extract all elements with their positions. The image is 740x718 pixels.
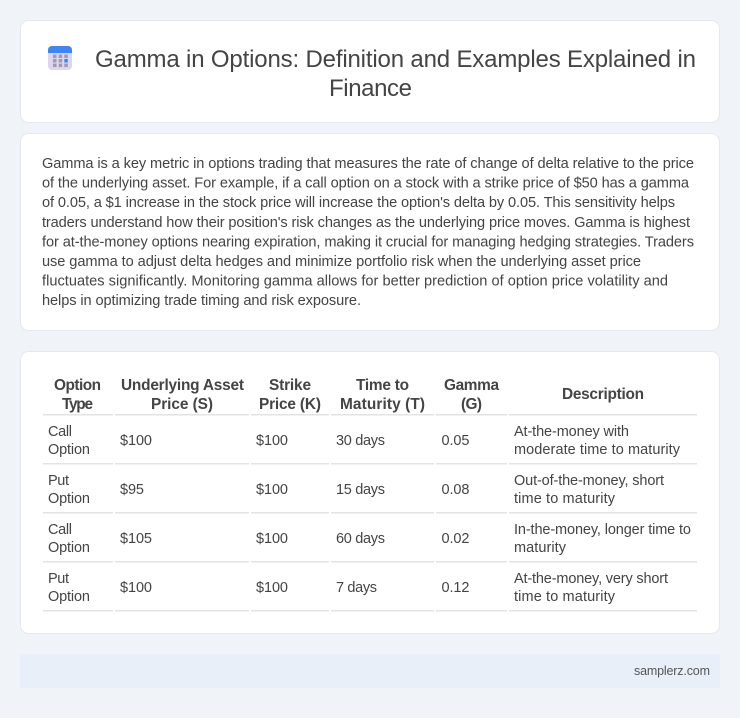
table header row: Gamma xyxy=(444,377,499,394)
table row: call option, $100: moderate time to maturity xyxy=(514,442,681,458)
text block: gamma explanation: traders understand how their position's risk changes as the underlying price moves. Gamma is highest xyxy=(42,215,690,231)
table row: put option, $100: time to maturity xyxy=(514,589,616,605)
table header row: Maturity (T) xyxy=(340,396,425,413)
text block: gamma explanation: helps in optimizing trade timing and risk exposure. xyxy=(42,293,361,309)
table row: put option, $100: 7 days xyxy=(336,580,377,596)
table row: put option, $100: At-the-money, very short xyxy=(514,571,668,587)
table row: put option, $95: 15 days xyxy=(336,482,385,498)
text block: gamma explanation: use gamma to adjust delta hedges and minimize portfolio risk when the underlying asset price xyxy=(42,254,641,270)
panel: table xyxy=(20,352,720,634)
table header row: Price (K) xyxy=(259,396,321,413)
table row: put option, $95 xyxy=(43,473,697,514)
table row: call option, $105: $100 xyxy=(256,531,288,547)
table header row: Strike xyxy=(269,377,311,394)
text block: gamma explanation: for at-the-money options nearing expiration, making it crucial for managing hedging strategies. Traders xyxy=(42,234,694,250)
table row: put option, $100: Option xyxy=(48,589,90,605)
table header row: Price (S) xyxy=(151,396,213,413)
table row: call option, $100: $100 xyxy=(120,433,152,449)
table row: call option, $100: At-the-money with xyxy=(514,424,629,440)
table row: call option, $100: $100 xyxy=(256,433,288,449)
text block: gamma explanation: of 0.05, a $1 increase in the stock price will increase the option's delta by 0.05. This sensitivity helps xyxy=(42,195,675,211)
panel: description text xyxy=(20,134,720,330)
table header row: Option xyxy=(54,377,101,394)
table row: call option, $105: 0.02 xyxy=(442,531,470,547)
footer xyxy=(20,654,720,688)
table row: call option, $105 xyxy=(43,522,697,562)
table header row xyxy=(43,377,697,416)
text block: gamma explanation: of the underlying asset. For example, if a call option on a stock with a strike price of $50 has a gamma xyxy=(42,176,690,192)
table header row: Underlying Asset xyxy=(121,377,244,394)
table row: call option, $105: 60 days xyxy=(336,531,385,547)
table row: call option, $105: maturity xyxy=(514,540,567,556)
title xyxy=(95,46,696,102)
table row: put option, $100: 0.12 xyxy=(442,580,470,596)
table row: put option, $95: time to maturity xyxy=(514,491,616,507)
text block: gamma explanation xyxy=(42,156,694,309)
table row: call option, $105: $105 xyxy=(120,531,152,547)
table header row: Type xyxy=(62,396,93,413)
table row: call option, $105: Option xyxy=(48,540,90,556)
table row: put option, $95: $95 xyxy=(120,482,144,498)
table row: call option, $100: Option xyxy=(48,442,90,458)
table row: call option, $100 xyxy=(43,424,697,464)
table row: put option, $95: $100 xyxy=(256,482,288,498)
table row: put option, $95: 0.08 xyxy=(442,482,470,498)
text block: gamma explanation: Gamma is a key metric in options trading that measures the rate of change of delta relative to the price xyxy=(42,156,694,172)
footer: samplerz.com xyxy=(634,664,710,678)
table header row: Description xyxy=(562,386,644,403)
table row: call option, $100: 30 days xyxy=(336,433,385,449)
panel: header xyxy=(20,20,720,122)
icon: calendar xyxy=(48,46,72,70)
table row: put option, $100: $100 xyxy=(120,580,152,596)
table header row: (G) xyxy=(461,396,482,413)
title: Finance xyxy=(329,75,412,102)
table row: put option, $95: Out-of-the-money, short xyxy=(514,473,664,489)
table row: put option, $100: $100 xyxy=(256,580,288,596)
title: Gamma in Options: Definition and Examples Explained in xyxy=(95,46,696,73)
table row: call option, $100: 0.05 xyxy=(442,433,470,449)
table row: call option, $105: In-the-money, longer time to xyxy=(514,522,691,538)
table header row: Time to xyxy=(356,377,409,394)
table row: put option, $95: Option xyxy=(48,491,90,507)
table row: call option, $100: Call xyxy=(48,424,72,440)
table row: put option, $100 xyxy=(43,571,697,612)
table row: call option, $105: Call xyxy=(48,522,72,538)
text block: gamma explanation: fluctuates significantly. Monitoring gamma allows for better prediction of option price volatility and xyxy=(42,274,668,290)
table row: put option, $95: Put xyxy=(48,473,69,489)
table row: put option, $100: Put xyxy=(48,571,69,587)
